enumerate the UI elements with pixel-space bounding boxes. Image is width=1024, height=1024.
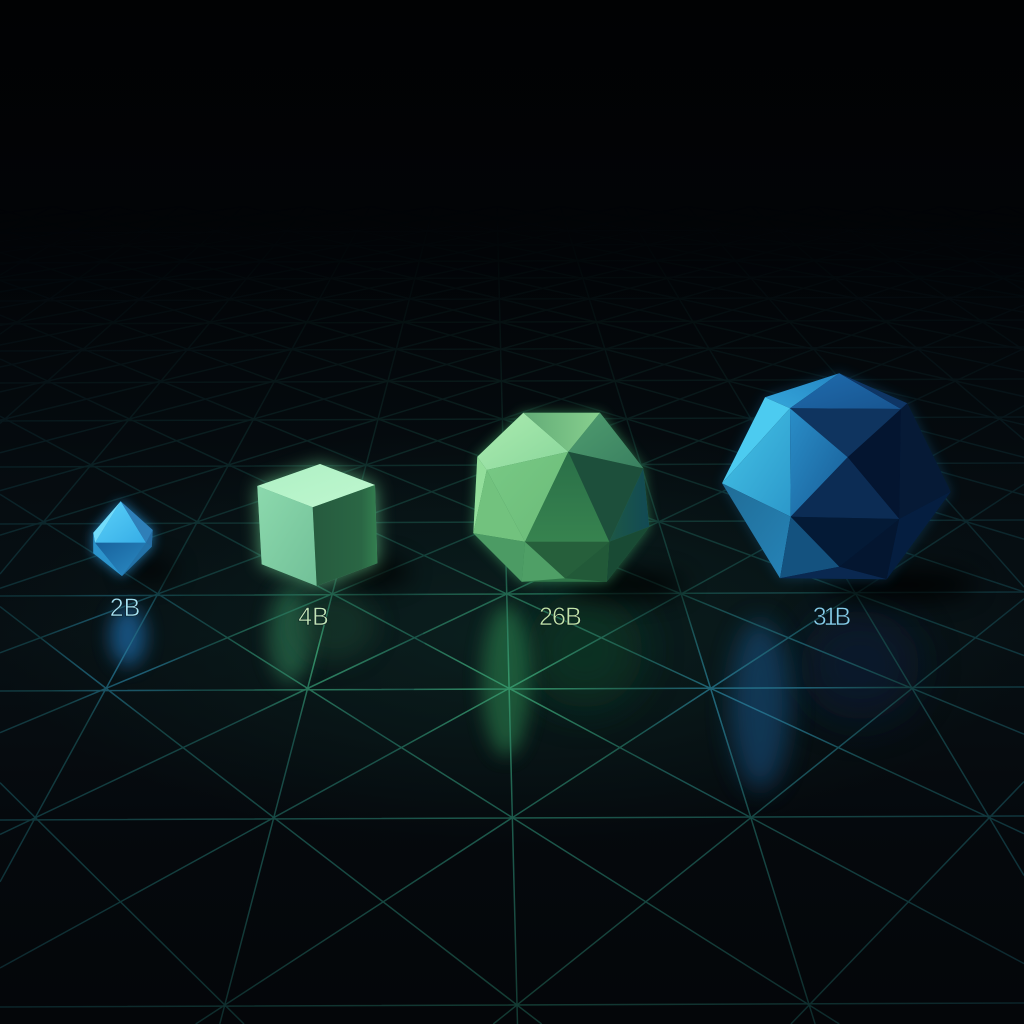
grid highlight: blue light pools <box>46 584 882 804</box>
shape: 31B icosahedron <box>722 373 951 579</box>
shape: 2B octahedron <box>93 501 153 576</box>
reflection: 2B octahedron <box>110 606 146 666</box>
label: 26B: 26B <box>539 603 581 631</box>
label: 31B: 31B <box>813 603 851 631</box>
reflection: 26B icosahedron <box>482 592 643 756</box>
label: 4B: 4B <box>298 603 329 631</box>
perspective triangular floor grid <box>0 306 1024 1024</box>
glow: blue icosahedron <box>722 373 951 579</box>
glow: octahedron <box>93 501 153 576</box>
contact shadows <box>124 558 975 601</box>
reflection: 31B icosahedron <box>730 610 920 790</box>
floor reflections <box>110 587 920 790</box>
facets: green icosahedron <box>473 413 649 582</box>
facets: cube <box>257 464 377 586</box>
glow: green icosahedron <box>473 413 649 582</box>
grid highlight: green light pools <box>219 569 637 790</box>
facets: octahedron <box>93 501 153 576</box>
shape: 26B icosahedron <box>473 413 649 582</box>
facets: blue icosahedron <box>722 373 951 579</box>
reflection: 4B cube <box>268 587 375 683</box>
shape: 4B cube <box>257 464 377 586</box>
label: 2B: 2B <box>110 594 140 622</box>
glow: cube <box>257 464 377 586</box>
